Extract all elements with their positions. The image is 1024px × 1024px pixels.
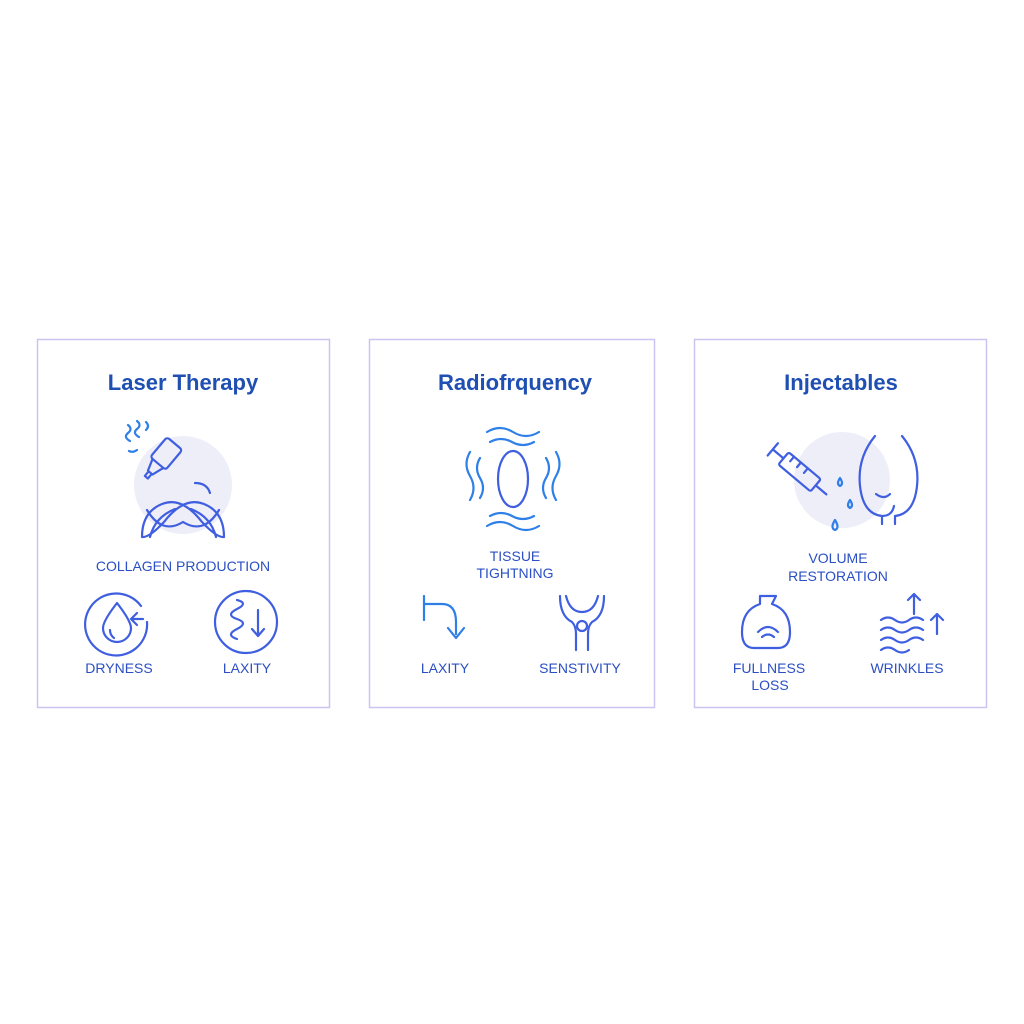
- label: wrinkles: WRINKLES: [870, 660, 944, 676]
- icon: syringe and body: [768, 432, 917, 530]
- label: dryness: DRYNESS: [85, 660, 153, 676]
- icon: rf waves: [466, 428, 560, 530]
- label: fullness loss: FULLNESS: [733, 660, 805, 676]
- label: sensitivity: SENSTIVITY: [539, 660, 622, 676]
- heading: injectables: Injectables: [784, 370, 898, 395]
- panel: injectables: RESTORATION: [788, 568, 888, 584]
- icon: laser collagen: [126, 421, 232, 537]
- label: laxity: LAXITY: [223, 660, 272, 676]
- icon: sensitivity: [560, 596, 604, 650]
- panel: injectables: LOSS: [751, 677, 789, 693]
- icon: wrinkles: [881, 594, 943, 652]
- panel: injectables: [694, 340, 986, 708]
- label: tissue tightening: TISSUE: [490, 548, 540, 564]
- label: laxity: LAXITY: [421, 660, 470, 676]
- icon: laxity arrow: [424, 596, 464, 638]
- icon: dryness: [85, 593, 147, 655]
- panel: radiofrequency: TIGHTNING: [476, 565, 554, 581]
- heading: radiofrquency: Radiofrquency: [438, 370, 593, 395]
- icon: fullness bag: [742, 596, 790, 648]
- panel: laser therapy: [38, 340, 330, 708]
- icon: laxity: [215, 591, 277, 653]
- label: collagen production: COLLAGEN PRODUCTION: [96, 558, 270, 574]
- label: volume restoration: VOLUME: [808, 550, 868, 566]
- heading: laser therapy: Laser Therapy: [108, 370, 259, 395]
- panel: radiofrequency: [370, 340, 654, 708]
